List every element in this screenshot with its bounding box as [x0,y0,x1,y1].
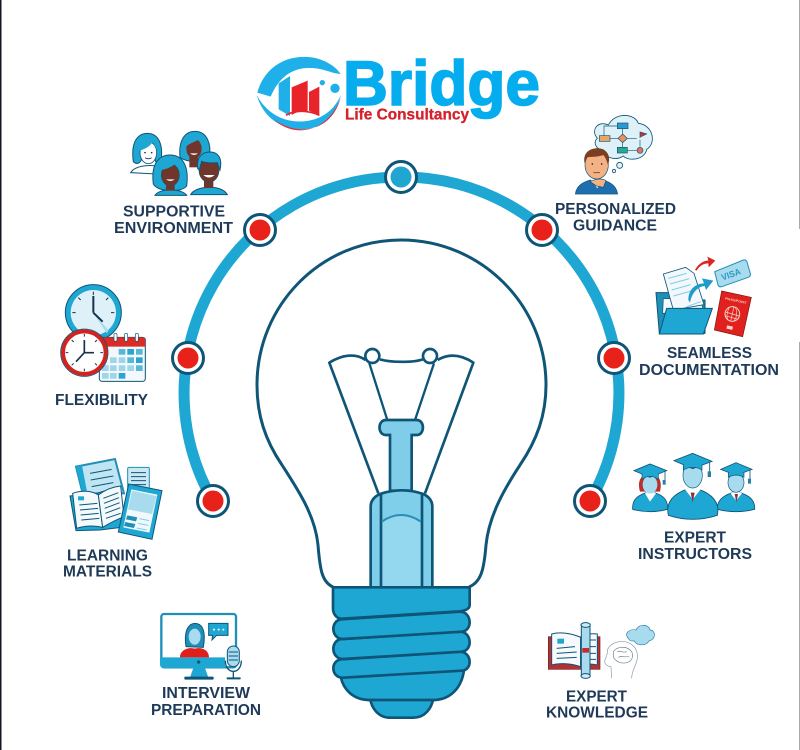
icon: books and tablet [70,459,162,539]
label: EXPERT [566,689,627,706]
icon: folder, visa and passport: PASSPORT [725,296,747,305]
icon: man thinking with flowchart cloud [575,115,652,194]
label [639,345,779,379]
label: SUPPORTIVE [123,204,225,220]
bulb glass outline [257,240,546,587]
label: GUIDANCE [573,218,657,235]
label [151,685,261,719]
icon: folder, visa and passport: VISA [720,266,743,283]
label: PREPARATION [151,702,261,719]
icon: folder, visa and passport [656,257,751,337]
label: DOCUMENTATION [639,362,779,379]
label: INTERVIEW [162,685,251,702]
label: FLEXIBILITY [55,392,148,409]
icon: three graduates [633,453,755,519]
panel: expert instructors [633,453,755,563]
panel: expert knowledge [546,623,654,722]
label [638,530,752,563]
label [546,689,648,722]
stem [379,420,423,491]
label: ENVIRONMENT [114,220,233,237]
node: learning materials [198,486,228,516]
panel: flexibility [55,285,148,409]
label: PERSONALIZED [555,201,676,218]
label: MATERIALS [63,564,152,581]
light bulb [257,240,546,718]
node: flexibility [172,342,204,374]
panel: learning materials [63,459,162,581]
label: INSTRUCTORS [638,546,752,563]
icon: clocks and calendar [61,285,145,381]
logo emblem [257,57,341,130]
icon: book, scroll and brain [548,623,654,678]
label: EXPERT [664,530,726,547]
label: SEAMLESS [667,345,752,362]
panel: interview preparation [151,614,261,719]
label [114,204,233,237]
node: seamless documentation [598,342,630,374]
label: LEARNING [67,548,148,564]
logo wordmark: Bridge [343,49,540,119]
panel: seamless documentation [639,257,779,379]
node: personalized guidance [526,214,558,246]
panel: personalized guidance [555,115,676,235]
stem foot [371,490,432,587]
icon: video call monitor with microphone [160,614,241,680]
panel: supportive environment [114,131,233,237]
label [555,201,676,235]
label [63,548,152,581]
node: supportive environment [244,214,276,246]
arc connecting the nodes [184,177,619,501]
icon: group of people [131,131,227,195]
node: top [386,162,416,192]
filament [329,349,473,493]
screw base [333,587,470,718]
logo tagline: Life Consultancy [345,106,469,124]
label: KNOWLEDGE [546,705,648,722]
logo: Bridge Life Consultancy [257,49,540,130]
node: expert instructors [574,486,606,516]
